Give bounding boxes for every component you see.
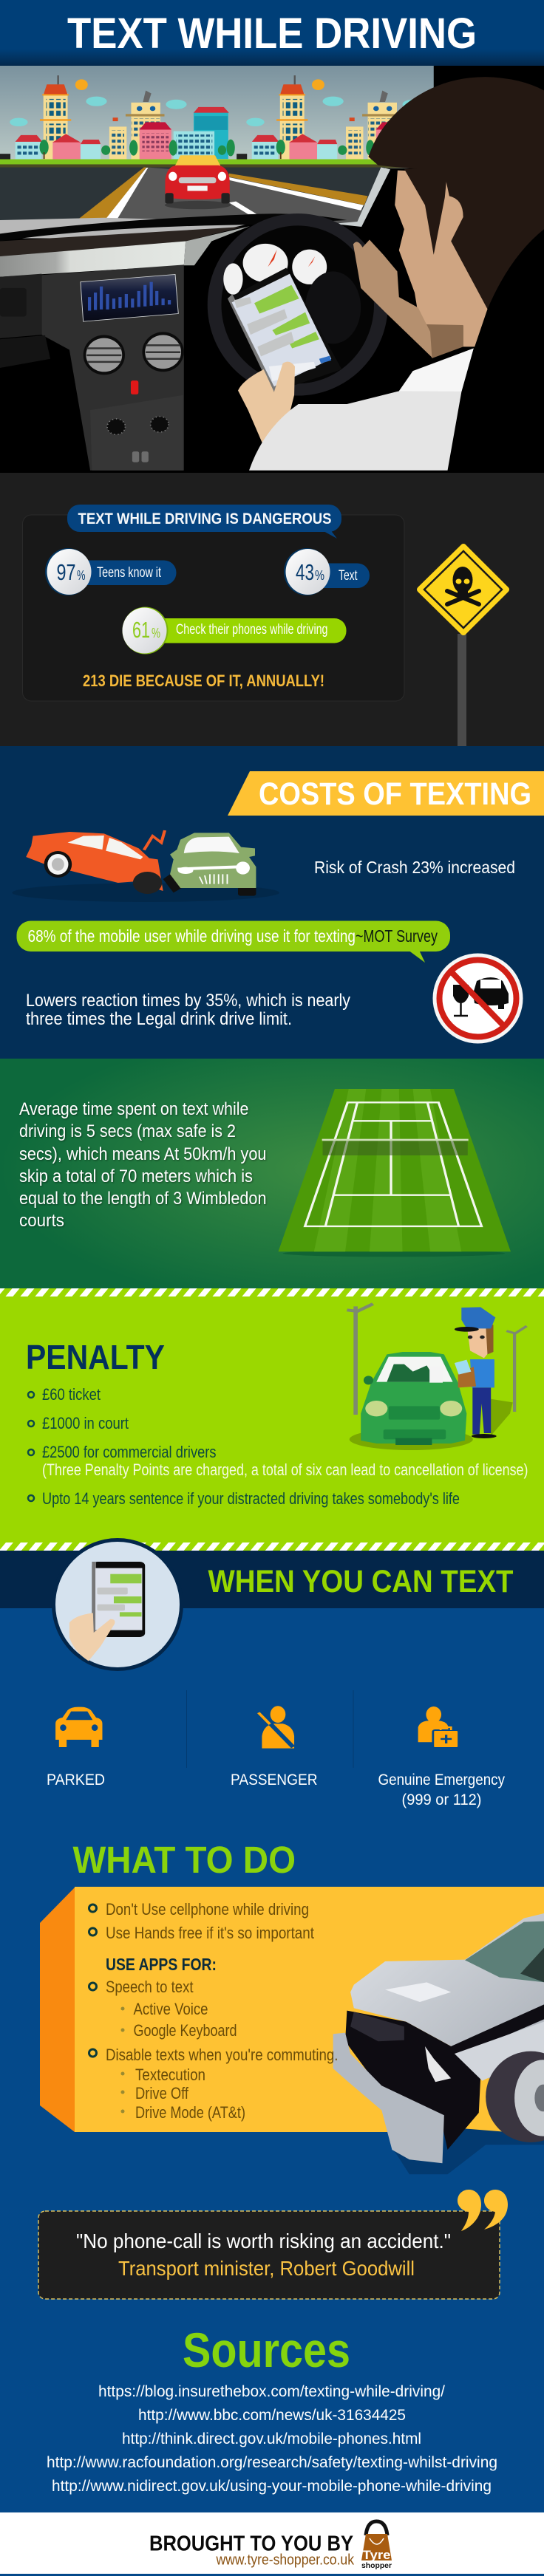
option: genuine emergency: Genuine Emergency [378, 1772, 505, 1788]
quote box: Transport minister, Robert Goodwill [118, 2257, 415, 2280]
driver's hair [369, 77, 544, 309]
red car on the road [165, 155, 231, 209]
stat: 43% text: % [315, 568, 324, 583]
penalty list: £60 ticket [42, 1385, 101, 1404]
option: passenger [231, 1706, 318, 1788]
option: genuine emergency [378, 1706, 505, 1808]
advice list: Speech to text [106, 1978, 194, 1996]
advice list: Drive Off [135, 2084, 189, 2102]
illustration: crashed silver car [333, 1913, 544, 2174]
sources list: http://www.racfoundation.org/research/safety/texting-whilst-driving [47, 2454, 497, 2471]
panel: header and driver scene [0, 0, 544, 473]
stat: 97% teens know it: Teens know it [97, 565, 162, 581]
panel: costs of texting [0, 746, 544, 1059]
advice list: Active Voice [133, 2000, 208, 2018]
penalty list: £2500 for commercial drivers [42, 1443, 216, 1461]
icon: hand holding phone in circle [52, 1538, 183, 1671]
phone showing text messages [228, 267, 341, 392]
option: genuine emergency: (999 or 112) [402, 1791, 482, 1808]
left hand on the wheel [353, 240, 432, 358]
logo: tyre shopper bag: Tyre [362, 2548, 390, 2562]
stat: 97% teens know it: % [77, 568, 86, 583]
stat: 61% check their phones: % [152, 626, 160, 640]
website: www.tyre-shopper.co.uk [216, 2552, 355, 2568]
sources list: http://think.direct.gov.uk/mobile-phones.html [122, 2430, 421, 2447]
penalty list: Upto 14 years sentence if your distracted driving takes somebody's life [42, 1489, 460, 1508]
logo: tyre shopper bag: shopper [361, 2562, 392, 2570]
reaction times text: Lowers reaction times by 35%, which is nearly [26, 991, 350, 1011]
illustration: tennis court [278, 1089, 511, 1257]
driver's white shirt [249, 348, 474, 471]
reaction times text [26, 991, 350, 1029]
advice list: Textecution [135, 2066, 205, 2084]
reaction distance paragraph: Average time spent on text while [19, 1099, 248, 1119]
icon: no drink driving sign [433, 953, 523, 1043]
panel: when you can text [0, 1538, 544, 2512]
center console display [81, 274, 178, 321]
panel: what to do [38, 1839, 544, 2495]
illustration: police officer ticketing green car [347, 1304, 527, 1450]
air vents [84, 332, 184, 375]
stat: 61% check their phones: Check their phones while driving [176, 622, 328, 638]
decorative stripe [0, 1288, 544, 1296]
hand holding the phone [238, 362, 295, 446]
crash risk text: Risk of Crash 23% increased [314, 858, 515, 877]
sources list [47, 2383, 497, 2495]
quote box [38, 2211, 500, 2299]
reaction times text: three times the Legal drink drive limit. [26, 1009, 292, 1029]
penalty list [28, 1385, 528, 1508]
heading: WHAT TO DO [72, 1839, 296, 1881]
annual deaths statement: 213 DIE BECAUSE OF IT, ANNUALLY! [83, 672, 324, 690]
reaction distance paragraph: equal to the length of 3 Wimbledon [19, 1189, 266, 1209]
speech bubble heading [67, 505, 341, 539]
green speech bubble: MOT survey [16, 920, 450, 963]
stat: 43% text: 43 [296, 559, 314, 585]
illustration: driver texting at the wheel [0, 66, 544, 473]
title banner: TEXT WHILE DRIVING [67, 10, 477, 58]
penalty list: £1000 in court [42, 1414, 129, 1432]
illustration: two cars crashing [12, 830, 279, 902]
stat: 97% teens know it [45, 548, 176, 595]
icon: skull warning sign on post [420, 547, 506, 746]
option: parked: PARKED [47, 1772, 105, 1788]
advice list [89, 1900, 339, 2122]
panel: footer credit [0, 2512, 544, 2576]
advice list: Don't Use cellphone while driving [106, 1900, 309, 1919]
icon: large quotation marks [458, 2190, 508, 2231]
stat: 97% teens know it: 97 [56, 559, 75, 585]
reaction distance paragraph [19, 1099, 266, 1231]
stat: 61% check their phones: 61 [132, 617, 150, 643]
reaction distance paragraph: secs), which means At 50km/h you [19, 1144, 266, 1164]
title banner [0, 0, 544, 66]
sources list: https://blog.insurethebox.com/texting-while-driving/ [98, 2383, 445, 2400]
reaction distance paragraph: skip a total of 70 meters which is [19, 1166, 253, 1186]
reaction distance paragraph: driving is 5 secs (max safe is 2 [19, 1121, 236, 1141]
stat: 61% check their phones [123, 607, 346, 655]
green speech bubble: MOT survey: 68% of the mobile user while driving use it for texting [28, 926, 356, 946]
advice list: Drive Mode (AT&t) [135, 2103, 245, 2122]
stat: 43% text: Text [339, 568, 358, 584]
panel: penalty [0, 1296, 544, 1542]
logo: tyre shopper bag [361, 2521, 392, 2570]
green speech bubble: MOT survey: ~MOT Survey [356, 926, 438, 946]
reaction distance paragraph: courts [19, 1211, 64, 1231]
panel: wimbledon comparison [0, 1059, 544, 1288]
quote box: "No phone-call is worth risking an accident." [76, 2230, 451, 2252]
decorative stripe [0, 1542, 544, 1551]
stat: 43% text [284, 548, 370, 595]
heading: WHEN YOU CAN TEXT [208, 1564, 513, 1599]
advice list: Use Hands free if it's so important [106, 1924, 314, 1942]
advice list: Disable texts when you're commuting. [106, 2046, 339, 2064]
driver's face and neck [395, 171, 488, 346]
advice list: USE APPS FOR: [106, 1955, 217, 1974]
heading: PENALTY [26, 1338, 165, 1376]
sources list: http://www.bbc.com/news/uk-31634425 [138, 2407, 406, 2424]
steering wheel and gauges [214, 219, 381, 389]
sources heading: Sources [183, 2323, 350, 2377]
sources list: http://www.nidirect.gov.uk/using-your-mobile-phone-while-driving [52, 2478, 492, 2495]
option: passenger: PASSENGER [231, 1772, 318, 1788]
yellow advice box with orange side [40, 1887, 544, 2132]
option: parked [47, 1707, 105, 1788]
advice list: Google Keyboard [133, 2021, 237, 2040]
brought to you by: BROUGHT TO YOU BY [149, 2532, 353, 2556]
speech bubble heading: TEXT WHILE DRIVING IS DANGEROUS [78, 510, 331, 527]
panel: text while driving is dangerous [0, 473, 544, 746]
